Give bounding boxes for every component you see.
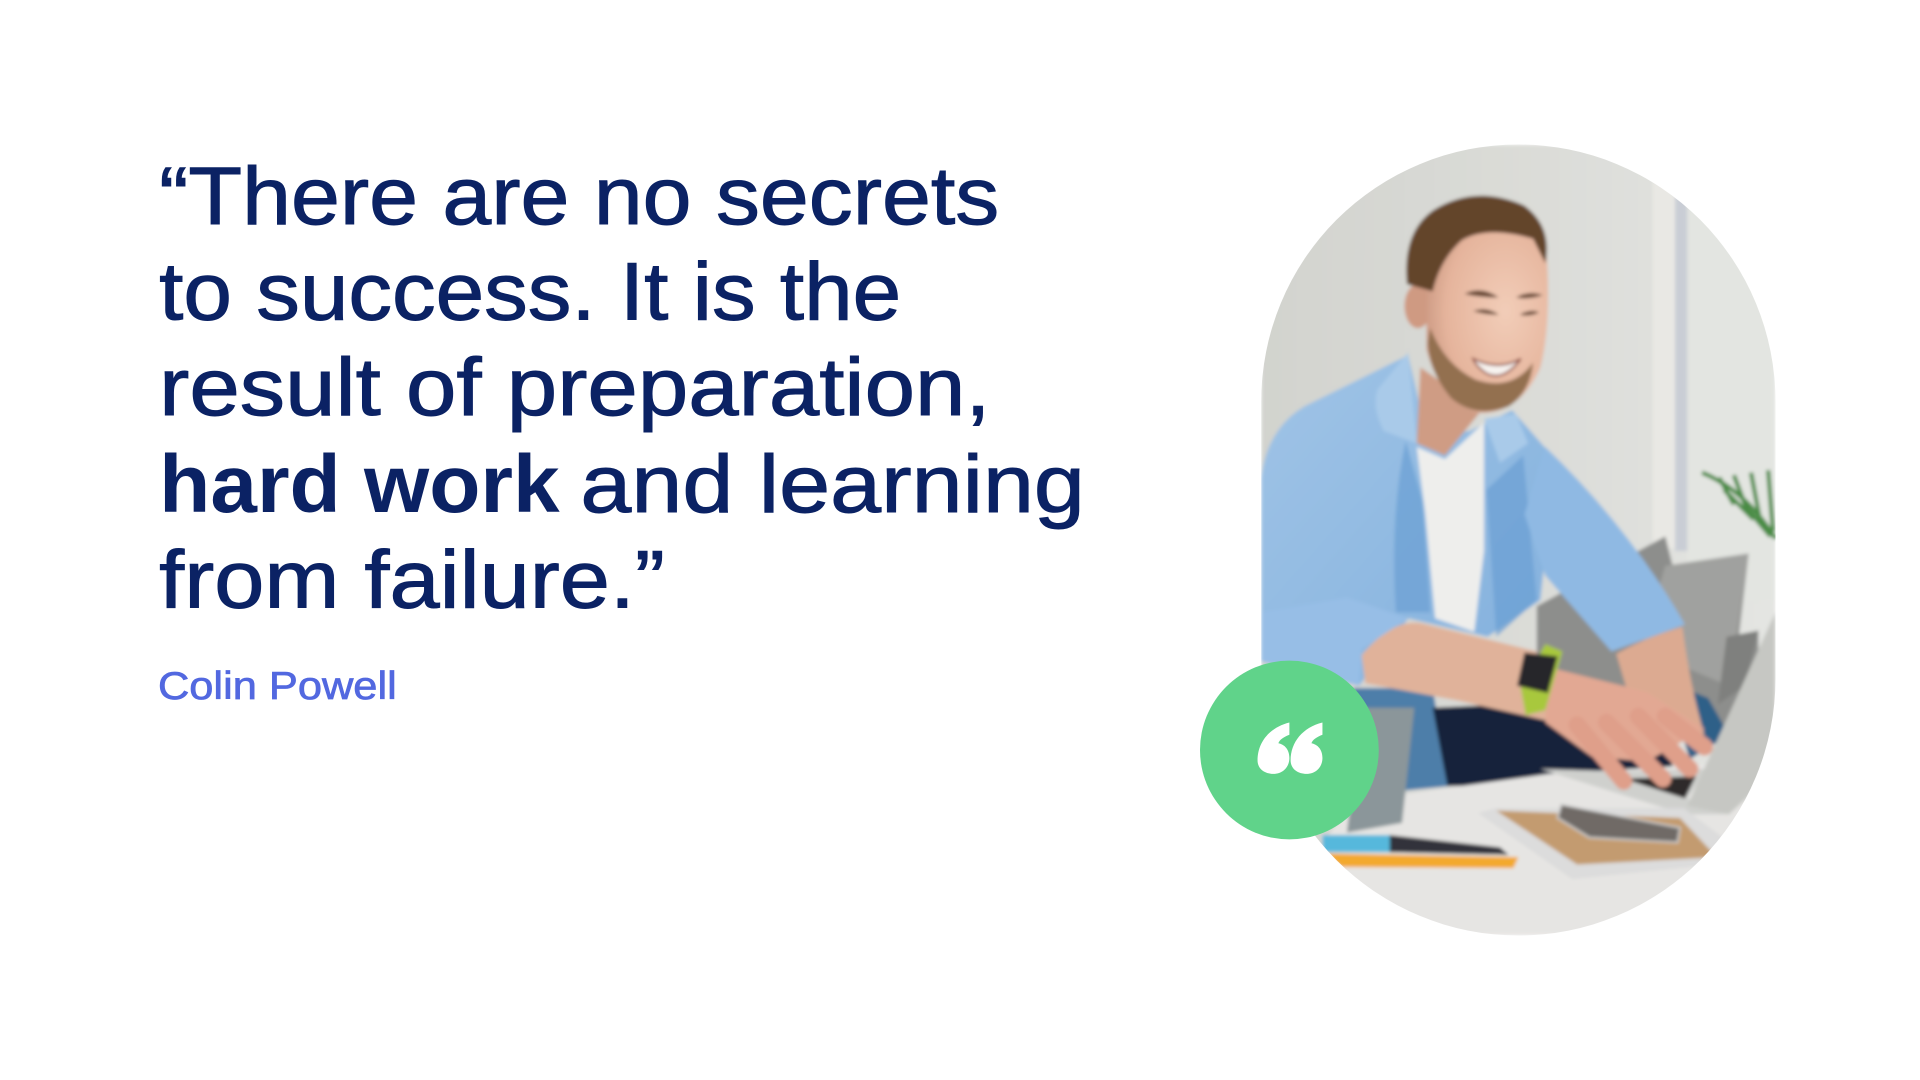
quote line 1: “There are no secrets	[159, 151, 999, 242]
quote text	[159, 151, 1085, 625]
plant	[1702, 470, 1776, 539]
phone	[1558, 804, 1680, 842]
quote badge	[1200, 661, 1379, 839]
quote line 3: result of preparation,	[159, 342, 991, 433]
laptop base	[1540, 769, 1729, 814]
table	[1330, 763, 1676, 934]
quote line 2: to success. It is the	[159, 247, 901, 338]
left shirt sleeve cuff	[1328, 611, 1402, 682]
watch	[1517, 644, 1562, 715]
stationery	[1322, 835, 1518, 868]
wall column	[1654, 184, 1688, 552]
quote line 4 regular words: and learning	[580, 439, 1085, 530]
notebook	[1478, 808, 1733, 879]
icon: quotation marks	[1258, 722, 1322, 774]
eyes and brows	[1464, 290, 1543, 316]
badge circle	[1200, 661, 1379, 839]
jeans	[1347, 681, 1729, 796]
smile	[1473, 359, 1521, 376]
left forearm	[1362, 623, 1555, 722]
beard	[1428, 328, 1533, 411]
head	[1404, 228, 1548, 413]
hand	[1545, 667, 1704, 781]
quote line 5: from failure.”	[159, 534, 665, 625]
attribution: Colin Powell	[158, 665, 397, 708]
laptop screen	[1687, 612, 1776, 814]
wall	[1261, 144, 1776, 846]
sofa	[1537, 536, 1758, 735]
trousers	[1433, 698, 1678, 786]
right forearm	[1616, 627, 1704, 735]
collar	[1376, 353, 1528, 463]
mug	[1347, 708, 1414, 833]
hair	[1406, 196, 1547, 291]
neck	[1417, 367, 1482, 456]
t-shirt	[1417, 422, 1484, 632]
quote line 4 bold words: hard work	[159, 439, 560, 530]
right shirt sleeve	[1524, 447, 1685, 651]
shirt torso	[1261, 355, 1555, 686]
shirt shading	[1394, 441, 1537, 637]
photo: man working at laptop	[1261, 144, 1776, 936]
